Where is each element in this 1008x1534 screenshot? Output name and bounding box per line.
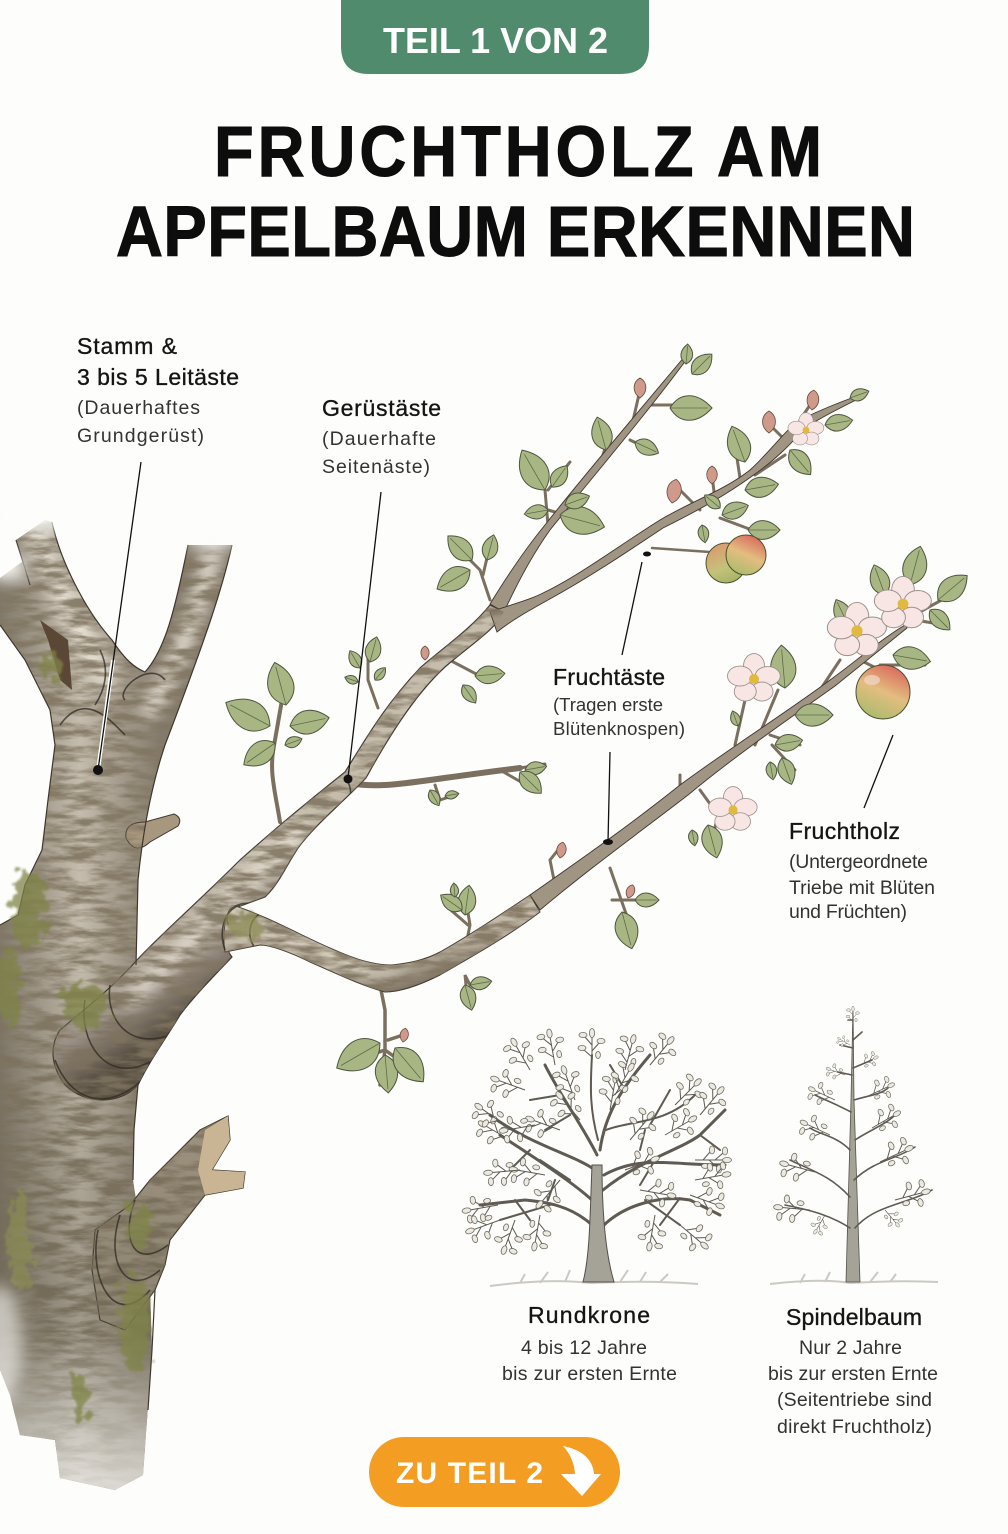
limb: lower branch xyxy=(224,895,540,992)
badge: Teil 1 von 2: TEIL 1 VON 2 xyxy=(383,20,608,61)
title xyxy=(116,112,915,272)
caption: Spindelbaum: direkt Fruchtholz) xyxy=(777,1416,932,1438)
caption: Rundkrone: 4 bis 12 Jahre xyxy=(521,1337,647,1359)
crown branches xyxy=(480,1055,725,1225)
caption: Spindelbaum xyxy=(768,1304,938,1438)
twiglets xyxy=(460,1192,500,1225)
limb: lower branch, thin outer part xyxy=(530,625,907,910)
label: Fruchtholz xyxy=(789,818,935,923)
twiglets xyxy=(772,1194,811,1224)
central leader and side shoots xyxy=(846,1006,860,1282)
limb: main scaffold branch, thin upper part xyxy=(490,350,692,612)
label: Fruchtholz: Triebe mit Blüten xyxy=(789,877,935,899)
label: Fruchtäste xyxy=(553,664,685,739)
label: Gerüstäste: (Dauerhafte xyxy=(322,428,436,450)
limb: upper side branch xyxy=(490,395,862,632)
label: Fruchtäste: Fruchtäste xyxy=(553,664,665,690)
caption: Spindelbaum: Spindelbaum xyxy=(786,1304,922,1330)
leader: Gerüstäste xyxy=(344,492,381,784)
leader: Fruchtäste lower xyxy=(603,752,613,845)
label: Stamm: Stamm & xyxy=(77,333,177,359)
small tree: Rundkrone xyxy=(460,1027,733,1286)
limb: main scaffold branch xyxy=(53,605,504,1100)
label: Fruchtäste: (Tragen erste xyxy=(553,694,663,715)
caption: Rundkrone: Rundkrone xyxy=(528,1302,650,1328)
trunk xyxy=(583,1165,614,1282)
caption: Spindelbaum: Nur 2 Jahre xyxy=(799,1337,902,1359)
leader: Stamm xyxy=(93,462,141,775)
apples xyxy=(706,535,910,719)
badge: Teil 1 von 2 xyxy=(341,0,649,74)
leader: Fruchtäste xyxy=(622,552,651,655)
small tree: Spindelbaum xyxy=(770,1006,938,1284)
leaves on branches xyxy=(219,344,974,1094)
label: Gerüstäste: Gerüstäste xyxy=(322,395,441,421)
small side stub xyxy=(126,814,180,848)
label: Gerüstäste: Seitenäste) xyxy=(322,456,430,478)
trunk outline xyxy=(0,522,232,1410)
title: APFELBAUM ERKENNEN xyxy=(116,192,915,272)
button: zu Teil 2 xyxy=(369,1437,620,1507)
trunk and main limbs xyxy=(0,350,907,1490)
thin twigs of the branches xyxy=(272,390,960,1085)
label: Stamm: 3 bis 5 Leitäste xyxy=(77,364,239,390)
faded painted ends xyxy=(0,506,238,1405)
caption: Rundkrone: bis zur ersten Ernte xyxy=(502,1363,677,1385)
limb: cut stub xyxy=(92,1116,245,1330)
label: Stamm: Grundgerüst) xyxy=(77,425,204,447)
label: Fruchtholz: Fruchtholz xyxy=(789,818,900,844)
caption: Spindelbaum: (Seitentriebe sind xyxy=(777,1389,932,1411)
title: FRUCHTHOLZ AM xyxy=(214,112,822,192)
moss patches xyxy=(0,647,261,1426)
ground grass xyxy=(770,1272,938,1284)
leader: Fruchtholz xyxy=(864,735,893,808)
label: Stamm: (Dauerhaftes xyxy=(77,397,200,419)
caption: Rundkrone xyxy=(502,1302,677,1385)
icon: curved arrow xyxy=(561,1446,601,1496)
label: Stamm xyxy=(77,333,239,447)
ground grass xyxy=(490,1270,698,1286)
label: Fruchtholz: (Untergeordnete xyxy=(789,851,928,873)
label: Fruchtholz: und Früchten) xyxy=(789,901,907,923)
blossoms xyxy=(709,413,931,830)
caption: Spindelbaum: bis zur ersten Ernte xyxy=(768,1363,938,1385)
label: Fruchtäste: Blütenknospen) xyxy=(553,718,685,739)
bark texture xyxy=(0,527,540,1490)
label: Gerüstäste xyxy=(322,395,441,478)
button: zu Teil 2: ZU TEIL 2 xyxy=(396,1457,543,1490)
